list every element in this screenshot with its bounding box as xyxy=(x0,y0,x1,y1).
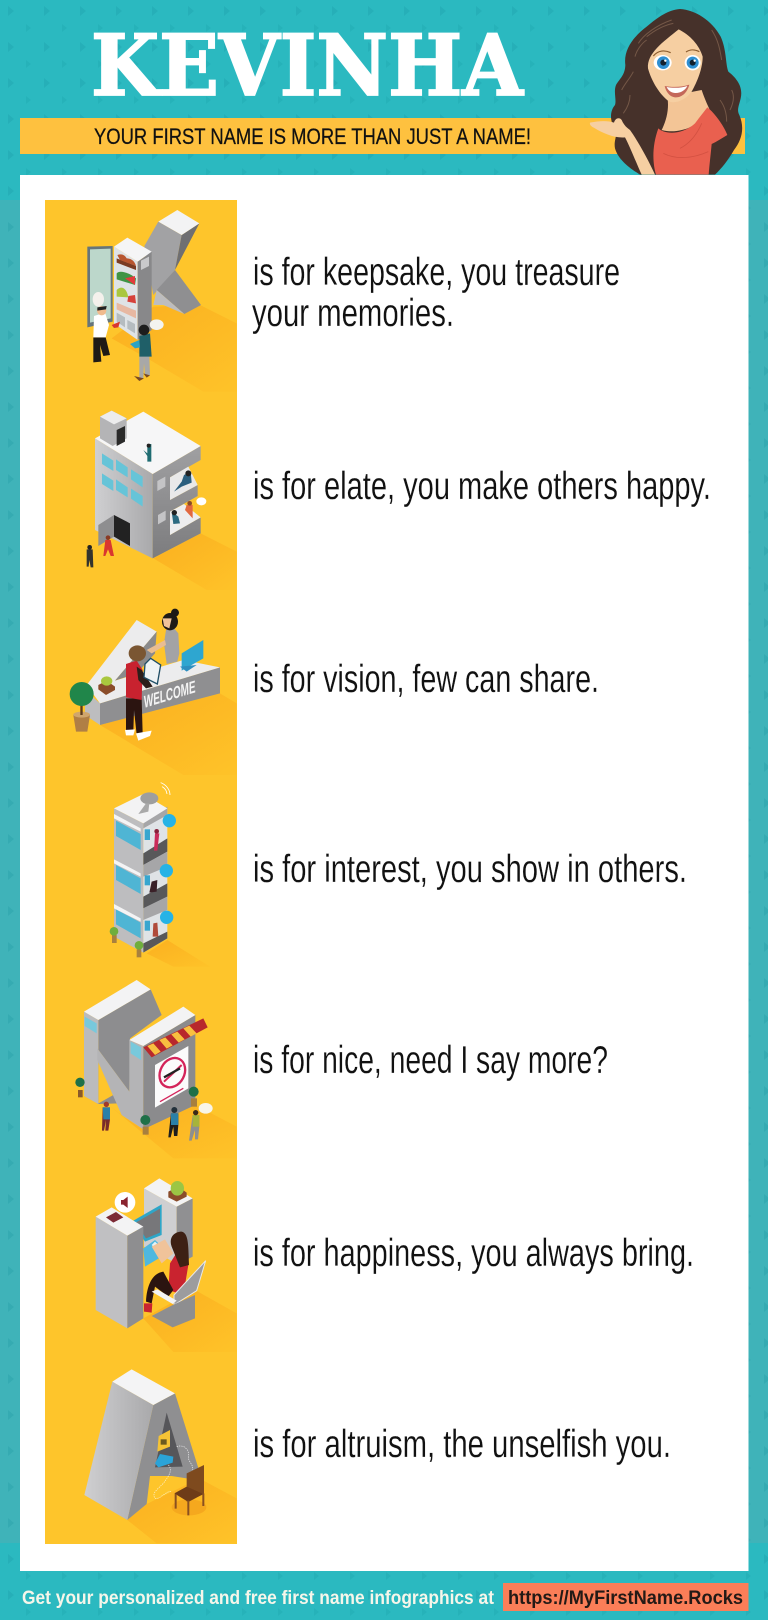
wooden chair xyxy=(172,1465,206,1515)
eyes xyxy=(653,50,701,70)
chair xyxy=(152,1261,206,1327)
footer url badge: https://MyFirstName.Rocks xyxy=(508,1588,743,1609)
arm and hand xyxy=(590,118,655,175)
K shape xyxy=(144,210,201,314)
small planter xyxy=(98,676,115,695)
title: KEVINHA xyxy=(91,16,525,115)
people and plants xyxy=(75,1078,213,1141)
illustration: letter V xyxy=(70,609,237,775)
text: K xyxy=(252,251,620,335)
building xyxy=(95,411,201,558)
windows xyxy=(102,453,143,507)
shadow xyxy=(143,1290,237,1352)
monitor xyxy=(180,640,203,672)
tower windows xyxy=(114,814,141,938)
welcome sign: WELCOME xyxy=(144,677,196,712)
shadow xyxy=(112,305,237,392)
shadow xyxy=(100,693,237,775)
text: N: is for nice, need I say more? xyxy=(253,1039,608,1082)
speaker bubble xyxy=(115,1192,135,1213)
chef xyxy=(93,292,120,362)
illustration: letter A xyxy=(84,1369,237,1543)
reception desk xyxy=(85,620,220,725)
shirt xyxy=(653,107,727,175)
shadow xyxy=(107,1103,237,1158)
character: woman presenting xyxy=(590,9,742,175)
computer xyxy=(132,1204,168,1267)
yellow column xyxy=(45,200,237,1544)
illustration: letter N xyxy=(75,980,237,1158)
office workers xyxy=(145,829,159,937)
A shape xyxy=(84,1369,200,1520)
woman at desk xyxy=(144,1232,189,1313)
doorway xyxy=(98,515,130,546)
receptionist xyxy=(147,609,179,664)
refrigerator xyxy=(114,238,152,340)
satellite dish xyxy=(138,783,170,814)
text: K: your memories. xyxy=(252,292,454,335)
N shape xyxy=(84,980,195,1129)
no smoking poster xyxy=(155,1046,190,1108)
hair xyxy=(611,9,742,175)
illustration: letter K xyxy=(87,210,237,392)
shadow xyxy=(127,1478,237,1543)
plant on pillar xyxy=(168,1181,187,1202)
neck and chest xyxy=(662,90,711,131)
smile xyxy=(665,85,689,97)
illustration: letter E xyxy=(87,411,237,590)
face xyxy=(648,29,703,102)
visitor xyxy=(125,645,161,741)
customer xyxy=(130,319,164,381)
tower xyxy=(114,794,167,953)
text: V: is for vision, few can share. xyxy=(253,658,599,701)
people xyxy=(87,444,206,567)
text: K: is for keepsake, you treasure xyxy=(253,251,620,294)
tower plants xyxy=(110,927,143,957)
dashed figure xyxy=(154,1446,193,1499)
shadow xyxy=(153,533,237,590)
screen and keyboard xyxy=(155,1430,173,1467)
left pillar xyxy=(96,1207,143,1328)
potted tree xyxy=(70,682,94,732)
illustration: letter H xyxy=(96,1178,237,1352)
chat badges xyxy=(160,814,176,924)
right pillar xyxy=(144,1178,193,1265)
shadow xyxy=(147,940,210,967)
striped awning xyxy=(143,1018,208,1057)
banner xyxy=(20,118,745,154)
illustration: letter I xyxy=(110,783,210,967)
subtitle: YOUR FIRST NAME IS MORE THAN JUST A NAME! xyxy=(94,124,531,149)
refrigerator door xyxy=(87,246,113,327)
footer call to action: Get your personalized and free first name infographics at xyxy=(22,1588,495,1609)
